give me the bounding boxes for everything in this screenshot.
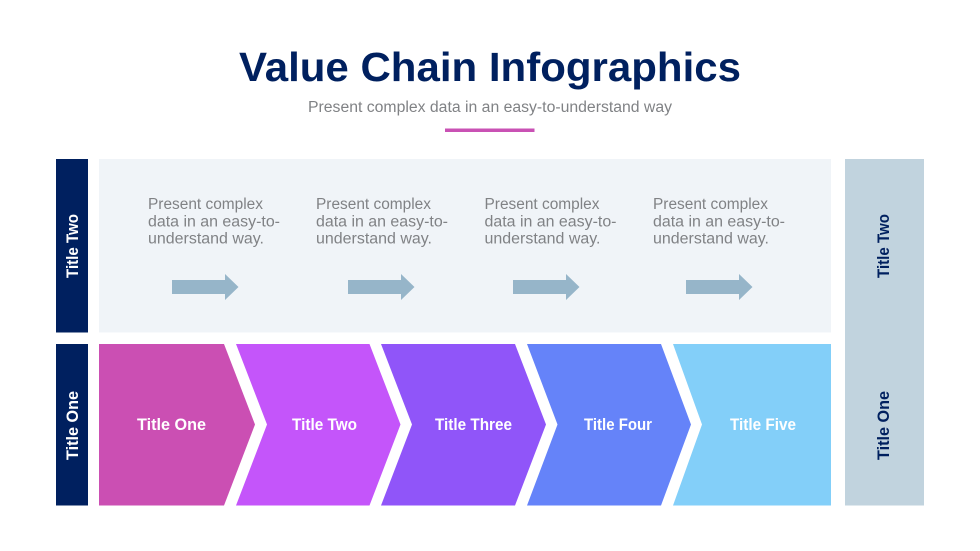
arrow 3 [513,274,580,300]
text block 1 [148,196,280,248]
arrow 1 [172,274,238,300]
text block 4: Present complex [653,196,768,213]
text block 3 [484,196,616,248]
arrow 2 [348,274,414,300]
text block 2: Present complex [316,196,431,213]
text block 1: understand way. [148,230,264,248]
title: Value Chain Infographics [239,44,741,90]
chevron 1: Title One [99,344,255,506]
text block 3: data in an easy-to- [484,214,616,230]
text block 3: Present complex [484,196,600,213]
right label: Title One: Title One [874,391,893,460]
chevron 3: Title Three [381,344,546,506]
row label: Title One [56,344,88,506]
panel: descriptions with arrows [99,159,831,332]
arrow 4 [686,274,752,300]
text block 2 [316,196,448,248]
row label: Title Two [56,159,88,332]
text block 1: data in an easy-to- [148,214,280,230]
chevron 5: Title Five [673,344,831,506]
title underline accent [445,128,534,132]
chevron 5: Title Five: Title Five [730,415,796,434]
row label: Title Two: Title Two [63,214,82,278]
chevron 3: Title Three: Title Three [435,415,512,434]
chevron 2: Title Two [236,344,400,506]
chevron 1: Title One: Title One [137,415,206,434]
text block 1: Present complex [148,196,263,213]
subtitle: Present complex data in an easy-to-understand way [308,99,672,116]
text block 3: understand way. [484,230,600,248]
chevron 4: Title Four: Title Four [584,415,652,434]
chevron 2: Title Two: Title Two [292,415,357,434]
text block 4 [653,196,785,248]
text block 2: understand way. [316,230,432,248]
text block 2: data in an easy-to- [316,214,448,230]
text block 4: data in an easy-to- [653,214,785,230]
panel: right side column [845,159,924,506]
chevron 4: Title Four [527,344,691,506]
text block 4: understand way. [653,230,769,248]
row label: Title One: Title One [63,391,82,460]
right label: Title Two: Title Two [874,214,893,278]
